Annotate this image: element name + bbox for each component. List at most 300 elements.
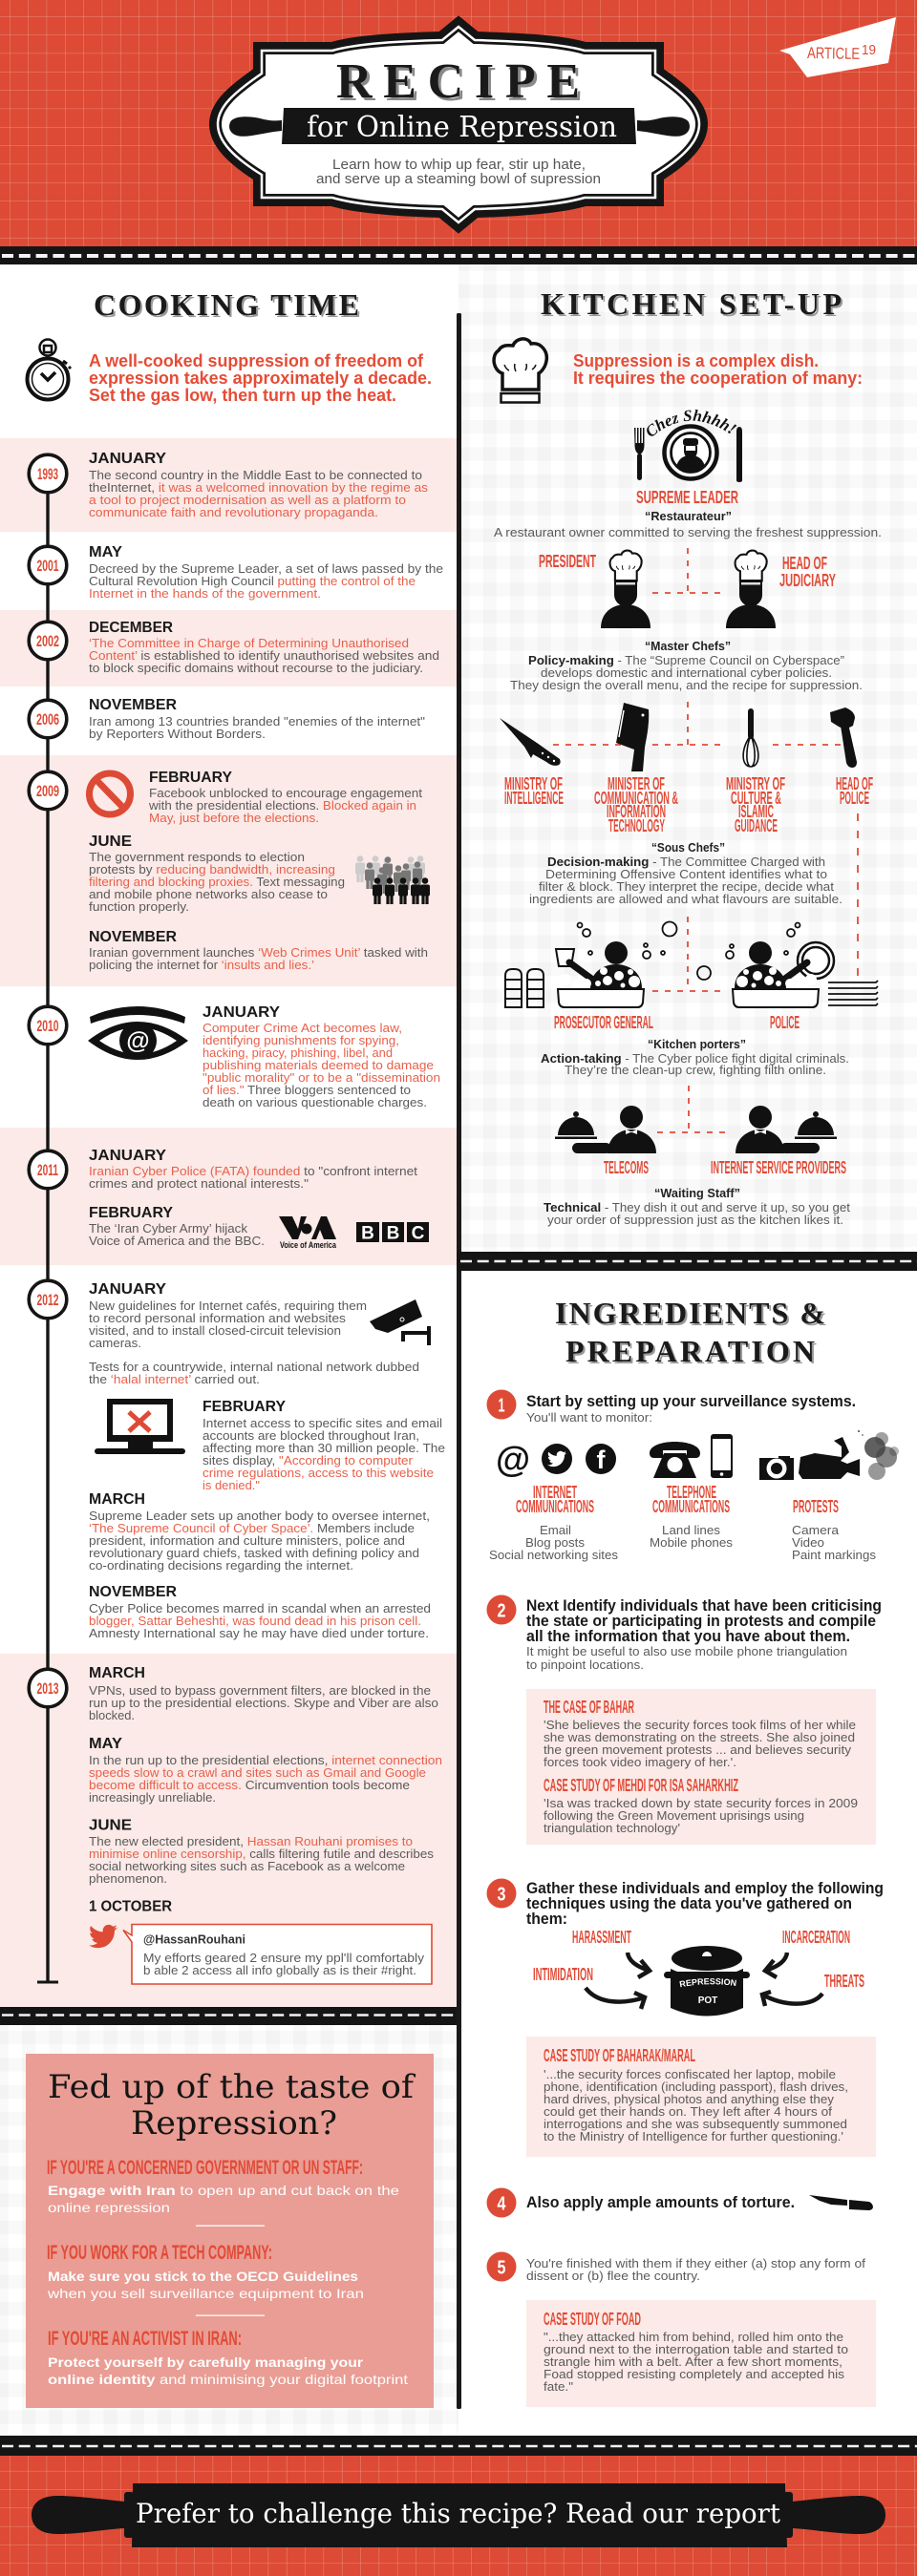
labels: ministries: POLICE bbox=[840, 789, 869, 808]
year badge: 1993 bbox=[37, 465, 58, 483]
november: policing the internet for ‘insults and lies.’ bbox=[89, 958, 314, 972]
logo: bbc: B bbox=[361, 1224, 374, 1243]
number badge bbox=[487, 2251, 516, 2282]
january: to record personal information and websites bbox=[89, 1311, 347, 1325]
logo: bbc: C bbox=[412, 1224, 425, 1243]
heading: fed up: Repression? bbox=[131, 2104, 337, 2143]
text: communicate faith and revolutionary propaganda. bbox=[89, 505, 378, 519]
february: is denied." bbox=[203, 1478, 260, 1492]
november: Amnesty International say he may have died under torture. bbox=[89, 1626, 429, 1640]
case study box: the green movement protests ... and believes security bbox=[544, 1742, 852, 1757]
master chefs text: “Master Chefs” bbox=[645, 639, 731, 653]
january: cameras. bbox=[89, 1336, 141, 1350]
heading: cooking time: COOKING TIME bbox=[96, 289, 361, 324]
icon: twitter bird bbox=[89, 1925, 117, 1948]
february: with the presidential elections. Blocked again in bbox=[148, 798, 416, 813]
role: head of judiciary: HEAD OF bbox=[782, 554, 827, 573]
june: The new elected president, Hassan Rouhani promises to bbox=[89, 1834, 413, 1848]
february: affecting more than 30 million people. The bbox=[203, 1441, 445, 1455]
step text: all the information that you have about them. bbox=[526, 1628, 850, 1645]
intro text: A well-cooked suppression of freedom of bbox=[89, 351, 424, 370]
case study box: THE CASE OF BAHAR bbox=[544, 1698, 634, 1717]
march: Supreme Leader sets up another body to oversee internet, bbox=[89, 1509, 430, 1523]
role: president bbox=[539, 551, 650, 628]
june: JUNE bbox=[89, 1818, 132, 1833]
number badge bbox=[487, 1594, 516, 1625]
left stitched band bbox=[0, 2007, 457, 2025]
june: function properly. bbox=[89, 899, 189, 914]
step text: the state or participating in protests and compile bbox=[526, 1613, 876, 1630]
labels: ministries: MINISTER OF bbox=[608, 774, 665, 793]
february bbox=[203, 1399, 445, 1492]
number badge: 5 bbox=[497, 2257, 506, 2278]
icon: blocked sign bbox=[90, 773, 130, 814]
january: death on various questionable charges. bbox=[203, 1095, 427, 1109]
category: telephone bbox=[650, 1483, 734, 1550]
tagline: and serve up a steaming bowl of supression bbox=[316, 171, 601, 187]
november: Iranian government launches ‘Web Crimes Unit’ tasked with bbox=[89, 945, 428, 960]
role: supreme leader: “Restaurateur” bbox=[645, 509, 732, 523]
logo: voice of america: Voice of America bbox=[280, 1240, 337, 1250]
advice: government: online repression bbox=[48, 2200, 170, 2215]
text: The second country in the Middle East to be connected to bbox=[89, 468, 422, 482]
month: NOVEMBER bbox=[89, 697, 177, 713]
case study box: CASE STUDY OF MEHDI FOR ISA SAHARKHIZ bbox=[544, 1776, 738, 1795]
intro text bbox=[89, 351, 432, 405]
year badge: 2011 bbox=[37, 1161, 58, 1179]
case study box: '...the security forces confiscated her laptop, mobile bbox=[544, 2067, 836, 2081]
tagline: Learn how to whip up fear, stir up hate, bbox=[332, 157, 586, 173]
timeline bands bbox=[0, 438, 457, 2007]
step 3 bbox=[487, 1879, 884, 2157]
header panel bbox=[0, 0, 917, 246]
intro text: Suppression is a complex dish. bbox=[573, 351, 819, 370]
case study box bbox=[526, 2037, 876, 2157]
category: internet: COMMUNICATIONS bbox=[516, 1497, 594, 1516]
icons: internet: @ bbox=[496, 1440, 530, 1479]
icon: repression pot: POT bbox=[698, 1995, 717, 2006]
june bbox=[89, 834, 345, 914]
advice: activist: online identity and minimising your digital footprint bbox=[48, 2372, 408, 2387]
role: head of judiciary bbox=[726, 551, 836, 628]
february bbox=[89, 1205, 265, 1248]
march: run up to the presidential elections. Skype and Viber are also bbox=[89, 1696, 438, 1710]
step 1 bbox=[487, 1390, 899, 1562]
role: head of judiciary: JUDICIARY bbox=[779, 571, 836, 590]
waiting staff text: Technical - They dish it out and serve it up, so you get bbox=[544, 1200, 850, 1214]
march bbox=[89, 1491, 430, 1573]
technique labels: HARASSMENT bbox=[572, 1928, 631, 1947]
year badge: 2010 bbox=[36, 1017, 59, 1035]
advice: government: IF YOU'RE A CONCERNED GOVERNMENT OR UN STAFF: bbox=[47, 2157, 363, 2179]
rolling pin with call to action: Prefer to challenge this recipe? Read our report bbox=[136, 2498, 781, 2529]
icon: waiters with cloches bbox=[555, 1106, 837, 1153]
may: increasingly unreliable. bbox=[89, 1790, 216, 1805]
november bbox=[89, 1584, 431, 1640]
title emblem bbox=[218, 27, 699, 222]
role: supreme leader bbox=[494, 488, 882, 539]
text: Content’ is established to identify unauthorised websites and bbox=[89, 648, 439, 663]
connector: kitchen porters bbox=[652, 917, 724, 991]
year badge bbox=[29, 1669, 67, 1707]
entry 2009 bbox=[29, 770, 430, 972]
text: to block specific domains without recourse to the judiciary. bbox=[89, 661, 423, 675]
year badge bbox=[29, 1151, 67, 1189]
january bbox=[89, 1148, 417, 1191]
may: become difficult to access. Circumvention tools become bbox=[89, 1778, 410, 1792]
january: JANUARY bbox=[89, 1281, 166, 1298]
year badge bbox=[29, 1006, 67, 1045]
june: JUNE bbox=[89, 834, 132, 850]
advice: government bbox=[47, 2157, 399, 2215]
november bbox=[89, 929, 428, 972]
icon: whisk bbox=[743, 708, 758, 767]
entry 2012 bbox=[29, 1280, 445, 1640]
february: FEBRUARY bbox=[203, 1399, 286, 1415]
case study box: CASE STUDY OF FOAD bbox=[544, 2310, 641, 2329]
january: publishing materials deemed to damage bbox=[203, 1058, 434, 1072]
june: filtering and blocking proxies. Text messaging bbox=[89, 875, 345, 889]
call to action box bbox=[26, 2054, 434, 2408]
case study box: could get their hands on. They left after 4 hours of bbox=[544, 2104, 832, 2119]
text bbox=[89, 636, 439, 675]
icon: cctv camera bbox=[370, 1299, 429, 1345]
rolling pin with call to action bbox=[32, 2483, 885, 2547]
heading: ingredients and preparation bbox=[555, 1296, 827, 1370]
rolling pin with subtitle bbox=[229, 108, 690, 144]
icons: internet bbox=[496, 1440, 616, 1479]
labels: ministries: INFORMATION bbox=[607, 802, 666, 821]
case study box: to the Ministry of Intelligence for further questioning.' bbox=[544, 2129, 843, 2143]
year badge bbox=[29, 622, 67, 660]
labels: ministries: ISLAMIC bbox=[738, 802, 774, 821]
category: protests bbox=[792, 1497, 877, 1562]
panel: fed up bbox=[0, 2025, 458, 2437]
march: president, information and culture ministers, police and bbox=[89, 1533, 405, 1548]
icon: blocked monitor bbox=[95, 1399, 185, 1454]
february: crime regulations, access to this website bbox=[203, 1466, 434, 1480]
case study box: 'Isa was tracked down by state security forces in 2009 bbox=[544, 1796, 858, 1810]
case study box: ground next to the interrogation table and started to bbox=[544, 2342, 848, 2356]
case study box: fate." bbox=[544, 2379, 573, 2394]
right stitched band bbox=[457, 1252, 917, 1271]
january bbox=[203, 1004, 440, 1109]
role: president: PRESIDENT bbox=[539, 552, 596, 571]
master chefs text: They design the overall menu, and the recipe for suppression. bbox=[510, 678, 863, 692]
sous chefs text bbox=[529, 840, 842, 906]
labels: ministries: INTELLIGENCE bbox=[504, 789, 564, 808]
may: In the run up to the presidential elections, internet connection bbox=[89, 1753, 442, 1767]
top stitched band bbox=[0, 246, 917, 264]
number badge bbox=[487, 1879, 516, 1908]
step text: techniques using the data you've gathered on bbox=[526, 1895, 852, 1912]
june bbox=[89, 1818, 435, 1886]
november: Cyber Police becomes marred in scandal when an arrested bbox=[89, 1601, 431, 1615]
icon: surveillance eye: @ bbox=[126, 1027, 150, 1054]
technique labels: INTIMIDATION bbox=[533, 1965, 593, 1984]
step text bbox=[526, 2256, 865, 2283]
case study box: strangle him with a belt. After a few short moments, bbox=[544, 2354, 842, 2369]
step 4 bbox=[487, 2188, 873, 2217]
centre divider bbox=[457, 313, 461, 2409]
kitchen porters text: They’re the clean-up crew, fighting filth online. bbox=[565, 1063, 826, 1077]
step text: It might be useful to also use mobile phone triangulation bbox=[526, 1644, 847, 1658]
case study box bbox=[526, 1689, 876, 1845]
step text: dissent or (b) flee the country. bbox=[526, 2269, 700, 2283]
panel: ingredients and preparation bbox=[487, 1296, 899, 2407]
entry 2011 bbox=[29, 1148, 429, 1250]
heading: kitchen set-up: KITCHEN SET-UP bbox=[541, 286, 842, 321]
category: protests: PROTESTS bbox=[793, 1497, 839, 1516]
text: by Reporters Without Borders. bbox=[89, 727, 266, 741]
waiting staff text: “Waiting Staff” bbox=[654, 1186, 740, 1200]
panel: kitchen set-up: HEAD OF bbox=[836, 774, 873, 793]
case study box: "...they attacked him from behind, rolled him onto the bbox=[544, 2330, 843, 2344]
march: blocked. bbox=[89, 1708, 135, 1722]
number badge: 4 bbox=[497, 2194, 506, 2215]
connector: waiting staff bbox=[657, 1086, 729, 1132]
category: internet: Email bbox=[540, 1523, 571, 1537]
heading: kitchen set-up: KITCHEN SET-UP bbox=[543, 288, 843, 323]
number badge: 2 bbox=[497, 1600, 506, 1621]
icon: chef hat bbox=[494, 339, 546, 403]
year badge bbox=[29, 771, 67, 810]
november: NOVEMBER bbox=[89, 929, 177, 945]
arrows into pot bbox=[586, 1953, 822, 2009]
february: accounts are blocked throughout Iran, bbox=[203, 1428, 419, 1443]
icon: repression pot bbox=[664, 1946, 750, 2016]
labels: ministries: MINISTRY OF bbox=[726, 774, 785, 793]
category: internet: INTERNET bbox=[533, 1483, 577, 1502]
step text: them: bbox=[526, 1911, 567, 1928]
february bbox=[148, 770, 422, 825]
category: protests: Paint markings bbox=[792, 1548, 877, 1562]
logo: bbc bbox=[356, 1222, 429, 1243]
category: telephone: COMMUNICATIONS bbox=[652, 1497, 730, 1516]
icon: stopwatch bbox=[27, 340, 71, 399]
number badge: 3 bbox=[497, 1885, 506, 1906]
category: telephone: Land lines bbox=[662, 1523, 721, 1537]
labels: ministries: TECHNOLOGY bbox=[608, 816, 665, 835]
text: a tool to project modernisation as well as a platform to bbox=[89, 493, 406, 507]
february: FEBRUARY bbox=[89, 1205, 173, 1221]
case study box: following the Green Movement uprisings using bbox=[544, 1808, 804, 1823]
january bbox=[89, 1281, 419, 1386]
january: Tests for a countrywide, internal national network dubbed bbox=[89, 1360, 419, 1374]
category: protests: Video bbox=[792, 1535, 824, 1550]
article 19 logo bbox=[779, 17, 896, 77]
case study box: forces took video imagery of her.'. bbox=[544, 1755, 736, 1769]
step text bbox=[526, 1880, 884, 1928]
sous chefs text: filter & block. They interpret the recipe, decide what bbox=[539, 879, 834, 894]
advice: government: Engage with Iran to open up and cut back on the bbox=[48, 2183, 399, 2198]
number badge bbox=[487, 2188, 516, 2217]
year badge bbox=[29, 1280, 67, 1319]
technique labels bbox=[533, 1928, 864, 1991]
connector: sous chefs bbox=[553, 702, 841, 745]
entry 2010 bbox=[29, 1004, 440, 1109]
heading: ingredients and preparation: INGREDIENTS & bbox=[557, 1298, 827, 1332]
month: DECEMBER bbox=[89, 620, 173, 636]
case study box: hard drives, physical photos and anything else they bbox=[544, 2092, 835, 2106]
entry 2002 bbox=[29, 620, 439, 675]
kitchen porters text: “Kitchen porters” bbox=[648, 1037, 746, 1051]
text: Iran among 13 countries branded "enemies of the internet" bbox=[89, 714, 425, 728]
february: sites display, "According to computer bbox=[203, 1453, 414, 1467]
month: JANUARY bbox=[89, 451, 166, 467]
panel: kitchen set-up bbox=[492, 286, 882, 1227]
1 october: 1 OCTOBER bbox=[89, 1898, 172, 1915]
kitchen porters text: Action-taking - The Cyber police fight digital criminals. bbox=[541, 1051, 849, 1066]
march: MARCH bbox=[89, 1665, 145, 1681]
icons: cameras and paint bbox=[759, 1430, 899, 1480]
june: protests by reducing bandwidth, increasing bbox=[89, 862, 335, 876]
master chefs text bbox=[510, 639, 863, 692]
text: Cultural Revolution High Council putting the control of the bbox=[89, 574, 416, 588]
heading: ingredients and preparation: PREPARATION bbox=[565, 1334, 815, 1368]
advice: activist: IF YOU'RE AN ACTIVIST IN IRAN: bbox=[48, 2328, 242, 2350]
entry 2006 bbox=[29, 697, 425, 741]
category: telephone: Mobile phones bbox=[650, 1535, 734, 1550]
role: supreme leader: A restaurant owner committed to serving the freshest suppression. bbox=[494, 525, 882, 539]
icon: cleaver bbox=[616, 703, 649, 771]
january: Iranian Cyber Police (FATA) founded to "confront internet bbox=[89, 1164, 417, 1178]
case study box: phone, identification (including passport), flash drives, bbox=[544, 2080, 848, 2094]
text: Internet in the hands of the government. bbox=[89, 586, 321, 601]
master chefs text: develops domestic and international cyber policies. bbox=[541, 665, 832, 680]
icon: chez shhhh restaurant logo bbox=[634, 409, 742, 482]
step text bbox=[526, 1597, 882, 1672]
january: visited, and to install closed-circuit television bbox=[89, 1323, 341, 1338]
heading: fed up: Fed up of the taste of bbox=[48, 2068, 416, 2106]
year badge bbox=[29, 700, 67, 738]
step text: Next Identify individuals that have been criticising bbox=[526, 1597, 882, 1615]
case study box: interrogations and she was subsequently summoned bbox=[544, 2117, 847, 2131]
sous chefs text: Decision-making - The Committee Charged with bbox=[547, 855, 825, 869]
sous chefs text: Determining Offensive Content identifies what to bbox=[545, 867, 827, 881]
text: theInternet, it was a welcomed innovation by the regime as bbox=[89, 480, 429, 495]
january: New guidelines for Internet cafés, requiring them bbox=[89, 1299, 367, 1313]
labels: prosecutor and police: PROSECUTOR GENERAL bbox=[554, 1013, 653, 1032]
may: MAY bbox=[89, 1736, 122, 1752]
tweet callout: @HassanRouhani bbox=[143, 1932, 245, 1946]
case study box: 'She believes the security forces took films of her while bbox=[544, 1718, 856, 1732]
article 19 logo: 19 bbox=[862, 42, 876, 58]
advice: tech company bbox=[47, 2242, 364, 2301]
march: ‘The Supreme Council of Cyber Space’. Members include bbox=[89, 1521, 415, 1535]
june: phenomenon. bbox=[89, 1871, 167, 1886]
intro text bbox=[573, 351, 863, 388]
intro text: Set the gas low, then turn up the heat. bbox=[89, 386, 396, 405]
labels: ministries: GUIDANCE bbox=[735, 816, 778, 835]
february: May, just before the elections. bbox=[149, 811, 319, 825]
tagline bbox=[316, 157, 601, 187]
heading: fed up bbox=[48, 2068, 416, 2143]
text bbox=[89, 468, 429, 519]
sous chefs text: “Sous Chefs” bbox=[651, 840, 725, 855]
advice: tech company: IF YOU WORK FOR A TECH COMPANY: bbox=[47, 2242, 272, 2264]
heading: ingredients and preparation: INGREDIENTS & bbox=[555, 1296, 825, 1330]
entry 2013 bbox=[29, 1665, 442, 1984]
march: VPNs, used to bypass government filters, are blocked in the bbox=[89, 1683, 431, 1698]
step text: Also apply ample amounts of torture. bbox=[526, 2194, 795, 2211]
heading: ingredients and preparation: PREPARATION bbox=[567, 1336, 817, 1370]
connector: head of police bbox=[857, 813, 859, 977]
advice: activist: Protect yourself by carefully managing your bbox=[48, 2354, 364, 2370]
june: social networking sites such as Facebook as a welcome bbox=[89, 1859, 405, 1873]
step text: You'll want to monitor: bbox=[526, 1410, 652, 1425]
sous chefs text: ingredients are allowed and what flavours are suitable. bbox=[529, 892, 842, 906]
case study box: she was demonstrating on the streets. She also joined bbox=[544, 1730, 855, 1744]
year badge bbox=[29, 454, 67, 493]
labels: ministries: CULTURE & bbox=[731, 789, 781, 808]
labels: telecoms and isps: TELECOMS bbox=[604, 1158, 649, 1177]
year badge: 2001 bbox=[36, 557, 59, 575]
panel: kitchen set-up: POLICE bbox=[770, 1013, 800, 1032]
text: ‘The Committee in Charge of Determining Unauthorised bbox=[89, 636, 409, 650]
february: Voice of America and the BBC. bbox=[89, 1234, 265, 1248]
icon: washing-up scene bbox=[505, 922, 878, 1007]
step 5 bbox=[487, 2251, 876, 2407]
january: Computer Crime Act becomes law, bbox=[203, 1021, 402, 1035]
title: recipe: RECIPE bbox=[339, 57, 583, 112]
icon: surveillance eye bbox=[88, 1006, 188, 1060]
category: internet bbox=[489, 1483, 619, 1562]
labels: ministries: MINISTRY OF bbox=[504, 774, 563, 793]
case study box: Foad stopped resisting completely and accepted his bbox=[544, 2367, 845, 2381]
technique labels: THREATS bbox=[824, 1972, 864, 1991]
january: of lies." Three bloggers sentenced to bbox=[203, 1083, 411, 1097]
step 2 bbox=[487, 1594, 882, 1845]
tweet callout: b able 2 access all info globally as is their #right. bbox=[143, 1963, 416, 1977]
master chefs text: Policy-making - The “Supreme Council on Cyberspace” bbox=[528, 653, 844, 667]
category: internet: Blog posts bbox=[525, 1535, 586, 1550]
step text: to pinpoint locations. bbox=[526, 1658, 644, 1672]
january: JANUARY bbox=[89, 1148, 166, 1164]
case study box: triangulation technology' bbox=[544, 1821, 680, 1835]
month: MAY bbox=[89, 544, 122, 560]
article 19 logo: ARTICLE bbox=[807, 44, 860, 63]
entry 2001 bbox=[29, 544, 443, 601]
number badge: 1 bbox=[499, 1396, 504, 1417]
june: The government responds to election bbox=[89, 850, 305, 864]
march bbox=[89, 1665, 438, 1722]
tweet callout bbox=[123, 1925, 432, 1984]
rolling pin with subtitle: for Online Repression bbox=[307, 111, 617, 144]
labels: ministries: COMMUNICATION & bbox=[594, 789, 678, 808]
year badge: 2006 bbox=[36, 710, 59, 728]
icon: repression pot: REPRESSION bbox=[679, 1978, 736, 1988]
logo: bbc: B bbox=[387, 1224, 399, 1243]
step text bbox=[526, 1393, 856, 1425]
icons: internet: f bbox=[596, 1446, 606, 1474]
march: revolutionary guard chiefs, tasked with defining policy and bbox=[89, 1546, 419, 1560]
number badge bbox=[487, 1390, 516, 1419]
heading: cooking time: COOKING TIME bbox=[94, 287, 359, 322]
february: FEBRUARY bbox=[149, 770, 232, 786]
footer panel bbox=[0, 2436, 917, 2576]
intro text: expression takes approximately a decade. bbox=[89, 369, 432, 388]
january: "public morality" or to be a "dissemination bbox=[203, 1070, 440, 1085]
icon: knife bbox=[500, 718, 561, 766]
entry 1993 bbox=[29, 451, 429, 519]
text: Decreed by the Supreme Leader, a set of laws passed by the bbox=[89, 561, 443, 576]
january: crimes and protect national interests." bbox=[89, 1176, 309, 1191]
labels: telecoms and isps bbox=[604, 1158, 846, 1177]
tweet callout: My efforts geared 2 ensure my ppl'll comfortably bbox=[143, 1951, 425, 1965]
kitchen porters text bbox=[541, 1037, 849, 1077]
year badge bbox=[29, 546, 67, 584]
